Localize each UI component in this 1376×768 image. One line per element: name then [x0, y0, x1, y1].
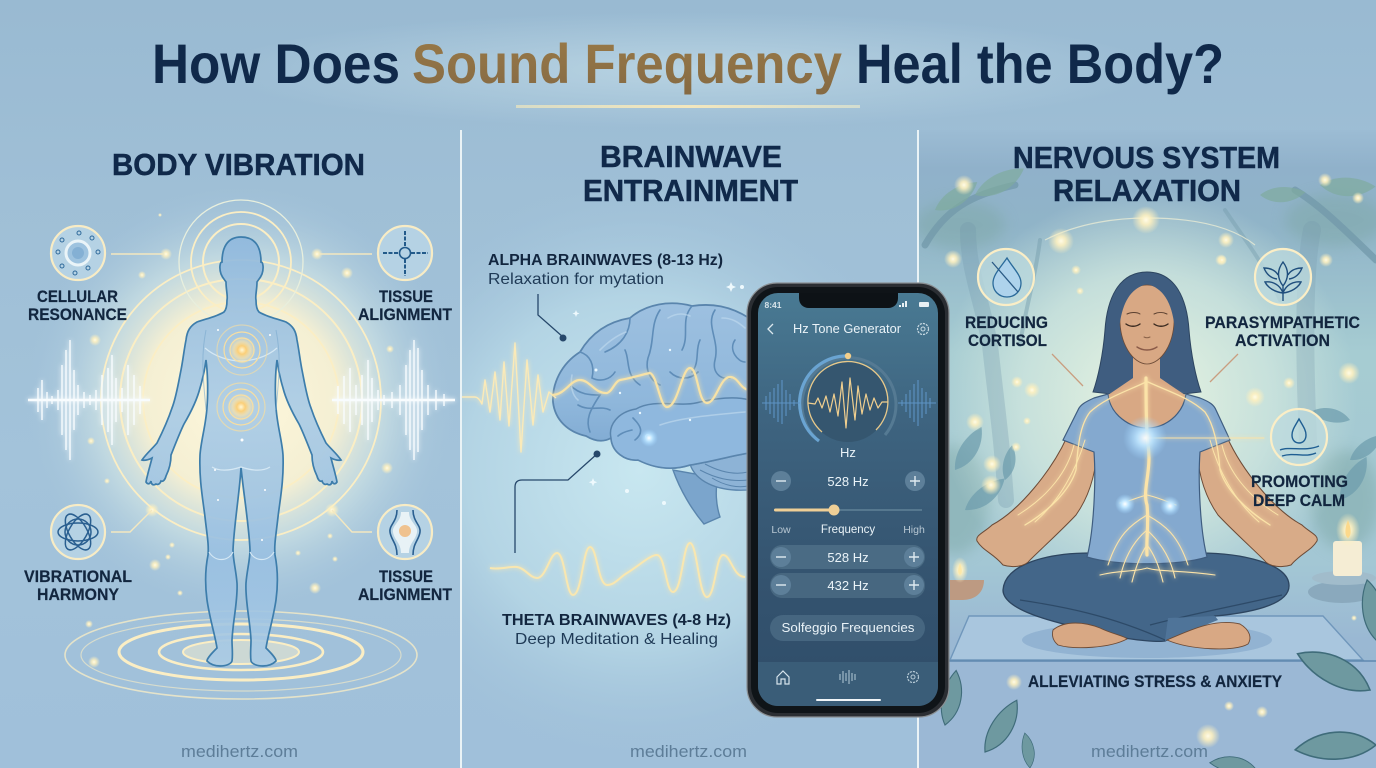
foreground leaves: [929, 580, 1376, 768]
icon: vibrational harmony: [51, 505, 105, 559]
smartphone app: Hz: [840, 445, 856, 460]
human figure: [142, 237, 341, 666]
preset 432 Hz: 432 Hz: [827, 578, 869, 593]
skin chest: [1108, 340, 1185, 432]
label: theta brainwaves: Deep Meditation & Healing: [515, 631, 718, 648]
app header: Hz Tone Generator: [793, 322, 901, 336]
label: vibrational harmony: [24, 568, 132, 604]
candle right: [1308, 513, 1376, 603]
illustration: brain: [553, 303, 749, 524]
label: promoting deep calm: PROMOTING: [1251, 473, 1348, 491]
heading: brainwave entrainment: ENTRAINMENT: [583, 173, 798, 208]
hair back: [1093, 272, 1201, 395]
hair front: [1108, 273, 1186, 330]
label: cellular resonance: RESONANCE: [28, 306, 127, 324]
phone body: [747, 283, 949, 717]
preset 528 Hz: 528 Hz: [827, 550, 869, 565]
heading: brainwave entrainment: BRAINWAVE: [600, 139, 782, 174]
status bar: [764, 293, 929, 310]
label: vibrational harmony: HARMONY: [37, 586, 119, 604]
resonance rings: [101, 200, 381, 540]
label: theta brainwaves: [502, 612, 731, 648]
connector lines: [111, 254, 372, 532]
icon: reducing cortisol: [978, 249, 1034, 305]
feet: [1053, 623, 1127, 648]
face: [1120, 285, 1174, 364]
alpha wave: [462, 343, 556, 452]
label: tissue alignment top: TISSUE: [379, 288, 433, 306]
theta wave: [490, 543, 745, 597]
icon: parasympathetic activation: [1255, 249, 1311, 305]
glow particles: [85, 213, 394, 668]
leader line: theta: [515, 450, 600, 553]
icon: tissue alignment top: [378, 226, 432, 280]
sparkles: [572, 282, 744, 505]
footer: panel 1 source: medihertz.com: [181, 742, 298, 761]
label: alleviating stress and anxiety: ALLEVIATING STRESS & ANXIETY: [1028, 673, 1282, 691]
label: reducing cortisol: CORTISOL: [968, 332, 1047, 350]
label: tissue alignment bottom: ALIGNMENT: [358, 586, 452, 604]
glow particles: [944, 173, 1364, 748]
sound wave left: [28, 340, 150, 460]
title: How Does: [152, 32, 400, 95]
icon: tissue alignment bottom: [378, 505, 432, 559]
panel: brainwave entrainment: [462, 146, 798, 757]
label: parasympathetic activation: ACTIVATION: [1235, 332, 1330, 350]
label: promoting deep calm: [1251, 473, 1348, 510]
sound wave right: [332, 340, 455, 460]
frequency slider: High: [903, 524, 925, 536]
woman meditating: [977, 272, 1317, 649]
panel: nervous system relaxation: [915, 130, 1376, 768]
wave across brain: [552, 368, 748, 407]
title: [152, 32, 1224, 95]
leader line: alpha: [538, 294, 566, 342]
solfeggio button: Solfeggio Frequencies: [782, 621, 914, 635]
glowing orbit: [1045, 218, 1255, 245]
solfeggio button: [770, 615, 925, 641]
forest background: [919, 168, 1376, 558]
glowing nervous system: [1018, 378, 1278, 582]
smartphone app: [747, 283, 949, 717]
label: reducing cortisol: [965, 314, 1048, 350]
label: tissue alignment top: [358, 288, 452, 324]
label: tissue alignment top: ALIGNMENT: [358, 306, 452, 324]
frequency row main: [771, 471, 925, 491]
panel: body vibration: [24, 147, 456, 761]
legs: [1003, 553, 1289, 641]
frequency row main: 528 Hz: [827, 474, 869, 489]
frequency slider: Frequency: [821, 524, 875, 536]
frequency dial: [762, 353, 936, 442]
status bar: 8:41: [764, 300, 782, 310]
label: alpha brainwaves: ALPHA BRAINWAVES (8-13 Hz): [488, 252, 723, 269]
icon: promoting deep calm: [1271, 409, 1327, 465]
icon: cellular resonance: [51, 226, 105, 280]
heading: nervous system relaxation: NERVOUS SYSTEM: [1013, 140, 1280, 175]
title: Heal the Body?: [856, 32, 1224, 95]
label: cellular resonance: [28, 288, 127, 324]
label: theta brainwaves: THETA BRAINWAVES (4-8 Hz): [502, 612, 731, 629]
footer: panel 3 source: medihertz.com: [1091, 742, 1208, 761]
label: reducing cortisol: REDUCING: [965, 314, 1048, 332]
label: promoting deep calm: DEEP CALM: [1253, 492, 1345, 510]
title: Sound Frequency: [412, 32, 842, 95]
candle left: [950, 557, 984, 600]
frequency slider: Low: [771, 524, 791, 536]
heading: brainwave entrainment: [583, 139, 798, 208]
label: parasympathetic activation: PARASYMPATHETIC: [1205, 314, 1360, 332]
label: alpha brainwaves: Relaxation for mytation: [488, 271, 664, 288]
yoga mat: [919, 616, 1376, 768]
heading: nervous system relaxation: RELAXATION: [1053, 173, 1241, 208]
label: vibrational harmony: VIBRATIONAL: [24, 568, 132, 586]
phone screen: [758, 293, 938, 706]
label: tissue alignment bottom: [358, 568, 452, 604]
connector lines: [1052, 354, 1238, 386]
t-shirt: [1063, 394, 1230, 564]
heading: body vibration: BODY VIBRATION: [112, 147, 365, 182]
preset 528 Hz: [770, 545, 925, 569]
app header: [768, 322, 928, 336]
label: tissue alignment bottom: TISSUE: [379, 568, 433, 586]
bottom navigation: [758, 662, 938, 706]
floor ripple rings: [65, 611, 417, 699]
frequency slider: [771, 504, 925, 536]
arms: [977, 437, 1097, 567]
label: alpha brainwaves: [488, 252, 723, 288]
facial features: [1126, 312, 1168, 350]
label: cellular resonance: CELLULAR: [37, 288, 118, 306]
footer: panel 2 source: medihertz.com: [630, 742, 747, 761]
preset 432 Hz: [770, 573, 925, 598]
heading: nervous system relaxation: [1013, 140, 1280, 208]
label: parasympathetic activation: [1205, 314, 1360, 350]
